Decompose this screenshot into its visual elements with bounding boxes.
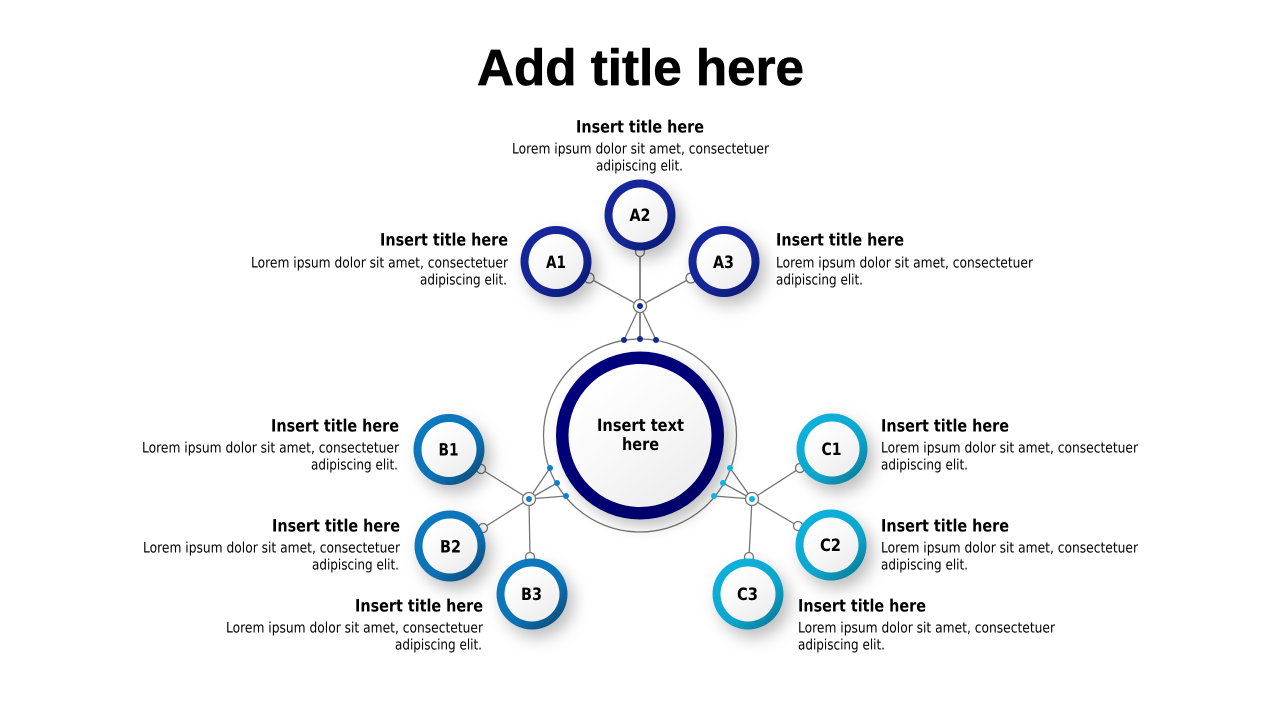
hub junction B with dots bbox=[522, 465, 569, 506]
text block A2: adipiscing elit. bbox=[596, 158, 683, 174]
central hub circle bbox=[544, 339, 736, 532]
node A1 bbox=[520, 226, 592, 297]
text block B3: adipiscing elit. bbox=[395, 638, 482, 654]
node B1 bbox=[414, 414, 484, 485]
text block C1: adipiscing elit. bbox=[881, 458, 968, 474]
node B3 bbox=[496, 558, 568, 630]
text block B3 bbox=[226, 596, 483, 654]
text block C2 bbox=[881, 516, 1138, 574]
text block A1: Lorem ipsum dolor sit amet, consectetuer bbox=[251, 256, 508, 272]
node C2 bbox=[796, 510, 866, 580]
text block A1: adipiscing elit. bbox=[420, 272, 507, 288]
central hub circle: here bbox=[622, 435, 659, 455]
node B2: B2 bbox=[440, 538, 461, 558]
text block C2: adipiscing elit. bbox=[881, 558, 968, 574]
node C2: C2 bbox=[820, 536, 841, 556]
node B2 bbox=[414, 510, 486, 582]
text block B2: adipiscing elit. bbox=[312, 558, 399, 574]
node B1: B1 bbox=[438, 440, 458, 460]
text block C1 bbox=[881, 416, 1138, 474]
text block B1: adipiscing elit. bbox=[311, 458, 398, 474]
text block C1: Insert title here bbox=[881, 416, 1009, 436]
text block B1 bbox=[142, 416, 399, 474]
text block C3 bbox=[798, 596, 1055, 654]
text block A2: Insert title here bbox=[576, 118, 704, 138]
text block C1: Lorem ipsum dolor sit amet, consectetuer bbox=[881, 440, 1138, 456]
text block A3 bbox=[776, 230, 1033, 288]
text block C3: Lorem ipsum dolor sit amet, consectetuer bbox=[798, 620, 1055, 636]
node A3 bbox=[688, 226, 760, 297]
node C3 bbox=[712, 558, 784, 630]
text block A3: Lorem ipsum dolor sit amet, consectetuer bbox=[776, 256, 1033, 272]
text block B2: Insert title here bbox=[272, 516, 400, 536]
text block B2 bbox=[143, 516, 400, 574]
text block A3: adipiscing elit. bbox=[776, 272, 863, 288]
node C1: C1 bbox=[822, 440, 842, 460]
text block B1: Insert title here bbox=[271, 416, 399, 436]
connector network: group A bbox=[584, 248, 696, 340]
text block A1 bbox=[251, 230, 508, 288]
text block B3: Insert title here bbox=[355, 596, 483, 616]
node A2: A2 bbox=[630, 206, 650, 226]
text block A2 bbox=[512, 118, 769, 174]
hub junction A with dots bbox=[621, 300, 659, 343]
text block A2: Lorem ipsum dolor sit amet, consectetuer bbox=[512, 142, 769, 158]
node C1 bbox=[796, 414, 868, 484]
node B3: B3 bbox=[521, 585, 542, 605]
text block B1: Lorem ipsum dolor sit amet, consectetuer bbox=[142, 440, 399, 456]
text block C3: Insert title here bbox=[798, 596, 926, 616]
title: Add title here bbox=[477, 39, 804, 96]
hub junction C with dots bbox=[711, 465, 758, 506]
text block A3: Insert title here bbox=[776, 230, 904, 250]
text block C3: adipiscing elit. bbox=[798, 638, 885, 654]
text block B2: Lorem ipsum dolor sit amet, consectetuer bbox=[143, 540, 400, 556]
central hub circle: Insert text bbox=[597, 416, 684, 436]
connector network: group C bbox=[714, 464, 804, 562]
node A3: A3 bbox=[713, 253, 734, 273]
node C3: C3 bbox=[737, 585, 758, 605]
text block C2: Insert title here bbox=[881, 516, 1009, 536]
text block B3: Lorem ipsum dolor sit amet, consectetuer bbox=[226, 620, 483, 636]
node A2 bbox=[604, 180, 676, 250]
text block A1: Insert title here bbox=[380, 230, 508, 250]
connector network: group B bbox=[476, 464, 566, 562]
node A1: A1 bbox=[546, 253, 566, 273]
text block C2: Lorem ipsum dolor sit amet, consectetuer bbox=[881, 540, 1138, 556]
